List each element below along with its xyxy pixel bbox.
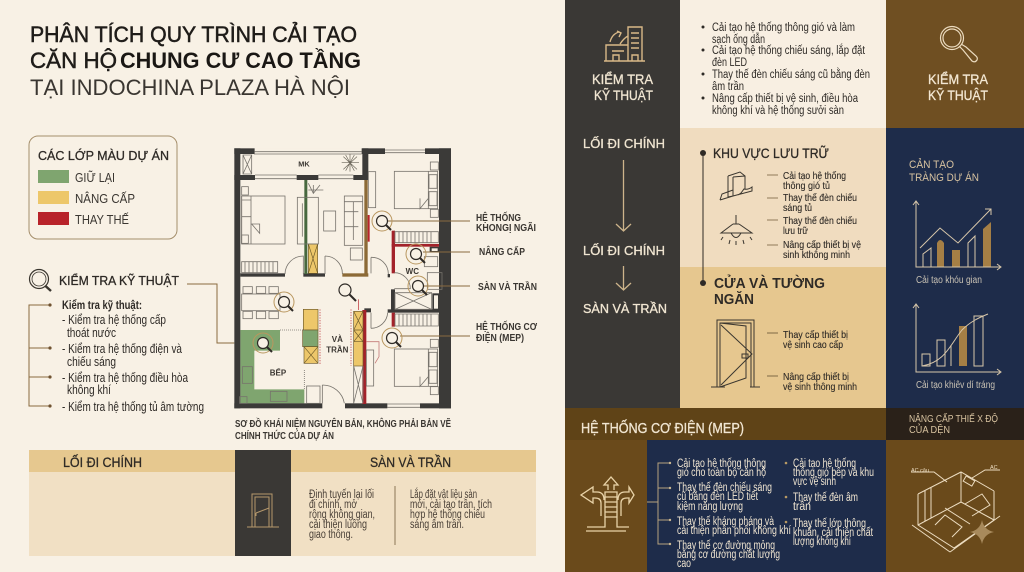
arrow: down — [616, 266, 631, 290]
panel: storage area: sinh kthông minh — [783, 249, 850, 261]
panel: MEP system: Thay thế đèn chiếu sáng — [677, 482, 772, 494]
decorative star — [970, 520, 994, 544]
panel: top bullet list: sạch ống dẫn — [712, 33, 765, 46]
panel: legend: NÂNG CẤP — [75, 191, 135, 206]
title: PHÂN TÍCH QUY TRÌNH CẢI TẠO — [30, 22, 357, 47]
panel: technical inspection: KIỂM TRA KỸ THUẬT — [59, 273, 179, 288]
panel: bottom walkway and floor: Định tuyến lại lối — [309, 489, 374, 501]
panel: bottom walkway and floor — [29, 450, 536, 556]
panel: storage area: Cải tạo hệ thống — [783, 170, 846, 182]
panel: MEP system: gió cho toàn bộ căn hộ — [677, 467, 766, 479]
panel: technical inspection: không khí — [67, 383, 111, 397]
title: TẠI INDOCHINA PLAZA HÀ NỘI — [30, 75, 350, 100]
caption — [235, 417, 451, 442]
magnifier markers on plan — [253, 211, 428, 353]
panel: MEP system: Thay thế lớp thông — [793, 518, 866, 530]
panel: navy charts: CẢN TẠO — [909, 158, 954, 171]
panel: equipment upgrade — [886, 408, 1024, 572]
panel: dark process column: LỐI ĐI CHÍNH — [583, 243, 665, 258]
panel: dark process column: SÀN VÀ TRẦN — [583, 301, 667, 316]
panel: legend: CÁC LỚP MÀU DỰ ÁN — [38, 148, 169, 163]
panel: top right inspection — [886, 0, 1024, 128]
icon: magnifier — [30, 270, 51, 291]
panel: doors and partitions: Thay cấp thiết bị — [783, 329, 848, 341]
panel: bottom walkway and floor: rộng không gian, — [309, 509, 375, 521]
floor plan: BẾP — [270, 367, 287, 377]
panel: storage area: lưu trữ — [783, 225, 808, 237]
panel: top bullet list: Cải tạo hệ thống thông gió và làm — [712, 22, 855, 34]
panel: bottom walkway and floor: đi chính, mở — [309, 499, 357, 511]
panel: bottom walkway and floor: giao thông. — [309, 529, 353, 541]
title — [30, 22, 361, 100]
caption: CHÍNH THỨC CỦA DỰ ÁN — [235, 429, 334, 442]
panel: MEP system: cao — [677, 558, 691, 570]
panel: storage area: KHU VỰC LƯU TRỮ — [713, 145, 829, 161]
panel: bottom walkway and floor: sáng âm trần. — [410, 519, 464, 531]
callout labels: HỆ THỐNG CƠ — [476, 319, 537, 333]
panel: legend — [29, 136, 177, 239]
panel: doors and partitions: vệ sinh cao cấp — [783, 339, 843, 351]
panel: bottom walkway and floor: hợp hệ thống chiếu — [410, 509, 485, 521]
panel: technical inspection: thoát nước — [67, 326, 116, 340]
timeline dot — [700, 280, 706, 286]
panel: MEP system: Cải tạo hệ thống — [793, 458, 856, 470]
panel: storage area: Thay thế đèn chiếu — [783, 192, 857, 204]
caption: SƠ ĐỒ KHÁI NIỆM NGUYÊN BẢN, KHÔNG PHẢI BẢN VẼ — [235, 417, 451, 430]
panel: bottom walkway and floor: cải thiện luồng — [309, 519, 367, 531]
panel: MEP system: cũ bằng đèn LED tiết — [677, 490, 759, 503]
icon: door — [711, 320, 760, 387]
panel: technical inspection: - Kiểm tra hệ thống điện và — [62, 342, 182, 356]
panel: top bullet list: âm trần — [712, 81, 744, 93]
panel: MEP system: cải thiện phân phối không khí — [677, 525, 792, 537]
panel: doors and partitions: vệ sinh thông minh — [783, 381, 857, 393]
panel: MEP system: Thay thế đèn âm — [793, 492, 858, 504]
panel: top bullet list: Thay thế đèn chiếu sáng cũ bằng đèn — [712, 68, 870, 81]
panel: navy charts: TRÀNG DỰ ÁN — [909, 171, 979, 184]
panel: equipment upgrade: CỦA DỆN — [909, 423, 950, 436]
floor plan — [234, 148, 451, 408]
panel: dark process column: KỸ THUẬT — [594, 88, 653, 103]
panel: navy charts: Cải tạo khiêv dí tráng — [916, 380, 995, 391]
panel: technical inspection: - Kiểm tra hệ thống cấp — [62, 313, 166, 327]
panel: MEP system: lượng không khí — [793, 536, 852, 548]
floor plan: VÀ — [332, 335, 343, 344]
vertical timeline connector — [702, 153, 704, 284]
panel: doors and partitions — [680, 267, 886, 408]
panel: top bullet list — [680, 0, 886, 128]
callout labels: SÀN VÀ TRẦN — [478, 280, 537, 293]
callout labels: HỆ THỐNG — [476, 210, 521, 224]
callout labels: NÂNG CẤP — [479, 245, 525, 258]
floor plan: MK — [298, 159, 310, 168]
panel: MEP system: vực vệ sinh — [793, 476, 836, 488]
panel: top bullet list: không khí và hệ thống sưởi sàn — [712, 105, 844, 117]
callout labels: ĐIỆN (MEP) — [476, 331, 524, 344]
panel: top right inspection: KIỂM TRA — [928, 72, 988, 87]
panel: top bullet list: Nâng cấp thiết bị vệ sinh, điều hòa — [712, 93, 858, 105]
panel: doors and partitions: CỬA VÀ TƯỜNG — [714, 274, 825, 292]
icon: door — [247, 494, 279, 527]
floor plan: TRẦN — [326, 344, 349, 354]
panel: equipment upgrade: AC — [990, 465, 998, 471]
panel: top right inspection: KỸ THUẬT — [928, 88, 988, 103]
icon: cabinet — [720, 172, 752, 200]
title: CĂN HỘ — [30, 48, 117, 73]
panel: technical inspection: chiếu sáng — [67, 355, 116, 369]
panel: MEP system: thông gió bếp và khu — [793, 467, 874, 479]
panel: MEP system: khuẩn, cải thiện chất — [793, 527, 874, 539]
icon: branching arrows — [581, 477, 634, 531]
panel: navy charts: Cải tạo khóu gian — [916, 275, 982, 286]
callout labels: KHONGỊ NGÃI — [476, 221, 536, 234]
panel: MEP system: Thay thế cơ đường mỏng — [677, 540, 775, 552]
panel: technical inspection: - Kiểm tra hệ thống điều hòa — [62, 371, 188, 385]
panel: equipment upgrade: NÂNG CẤP THIẾ X ĐỘ — [909, 412, 998, 425]
chart: bars and curve — [913, 304, 1001, 375]
panel: technical inspection: Kiểm tra kỹ thuật: — [62, 298, 142, 312]
callout labels — [476, 210, 537, 344]
panel: MEP system — [565, 408, 886, 572]
panel: top bullet list: đèn LED — [712, 57, 747, 69]
panel: MEP system: trần — [793, 501, 811, 513]
panel: navy charts — [886, 128, 1024, 408]
icon: magnifier — [940, 26, 977, 62]
panel: MEP system: kiệm năng lượng — [677, 501, 743, 513]
panel: dark process column: KIỂM TRA — [592, 72, 653, 87]
panel: bottom walkway and floor: LỐI ĐI CHÍNH — [63, 455, 142, 470]
panel: MEP system: bằng cơ đường chất lượng — [677, 548, 780, 561]
panel: legend: GIỮ LẠI — [75, 170, 115, 185]
panel: MEP system: Cải tạo hệ thống thông — [677, 458, 766, 470]
panel: technical inspection: - Kiểm tra hệ thống tủ âm tường — [62, 400, 204, 414]
title: CHUNG CƯ CAO TẦNG — [120, 48, 361, 73]
floor plan: WC — [406, 267, 419, 276]
icon: isometric room — [911, 470, 1000, 552]
panel: storage area — [680, 128, 886, 267]
panel: top bullet list: Cải tạo hệ thống chiếu sáng, lắp đặt — [712, 44, 866, 57]
panel: MEP system: Thay thế kháng pháng và — [677, 516, 774, 528]
chart: line and bars — [913, 201, 1001, 270]
panel: doors and partitions: NGĂN — [714, 291, 754, 308]
panel: storage area: thông gió tủ — [783, 180, 830, 192]
callout leader lines — [388, 221, 470, 336]
arrow: down — [616, 160, 631, 231]
icon: lamp — [721, 215, 752, 245]
icon: buildings — [604, 27, 645, 61]
panel: equipment upgrade: AC câu — [911, 468, 929, 474]
panel: technical inspection — [29, 270, 256, 414]
panel: doors and partitions: Nâng cấp thiết bị — [783, 371, 849, 383]
panel: bottom walkway and floor: Lắp đặt vật liệu sàn — [410, 488, 477, 501]
panel: legend: THAY THẾ — [75, 212, 129, 227]
panel: MEP system: HỆ THỐNG CƠ ĐIỆN (MEP) — [581, 419, 744, 437]
panel: storage area: Thay thế đèn chiếu — [783, 215, 857, 227]
panel: storage area: sáng tủ — [783, 202, 812, 214]
panel: bottom walkway and floor: SÀN VÀ TRẦN — [370, 455, 451, 470]
panel: storage area: Nâng cấp thiết bị vệ — [783, 239, 861, 251]
panel: bottom walkway and floor: mới, cải tạo trần, tích — [410, 499, 492, 511]
panel: dark process column — [565, 0, 680, 408]
panel: dark process column: LỐI ĐI CHÍNH — [583, 136, 665, 151]
